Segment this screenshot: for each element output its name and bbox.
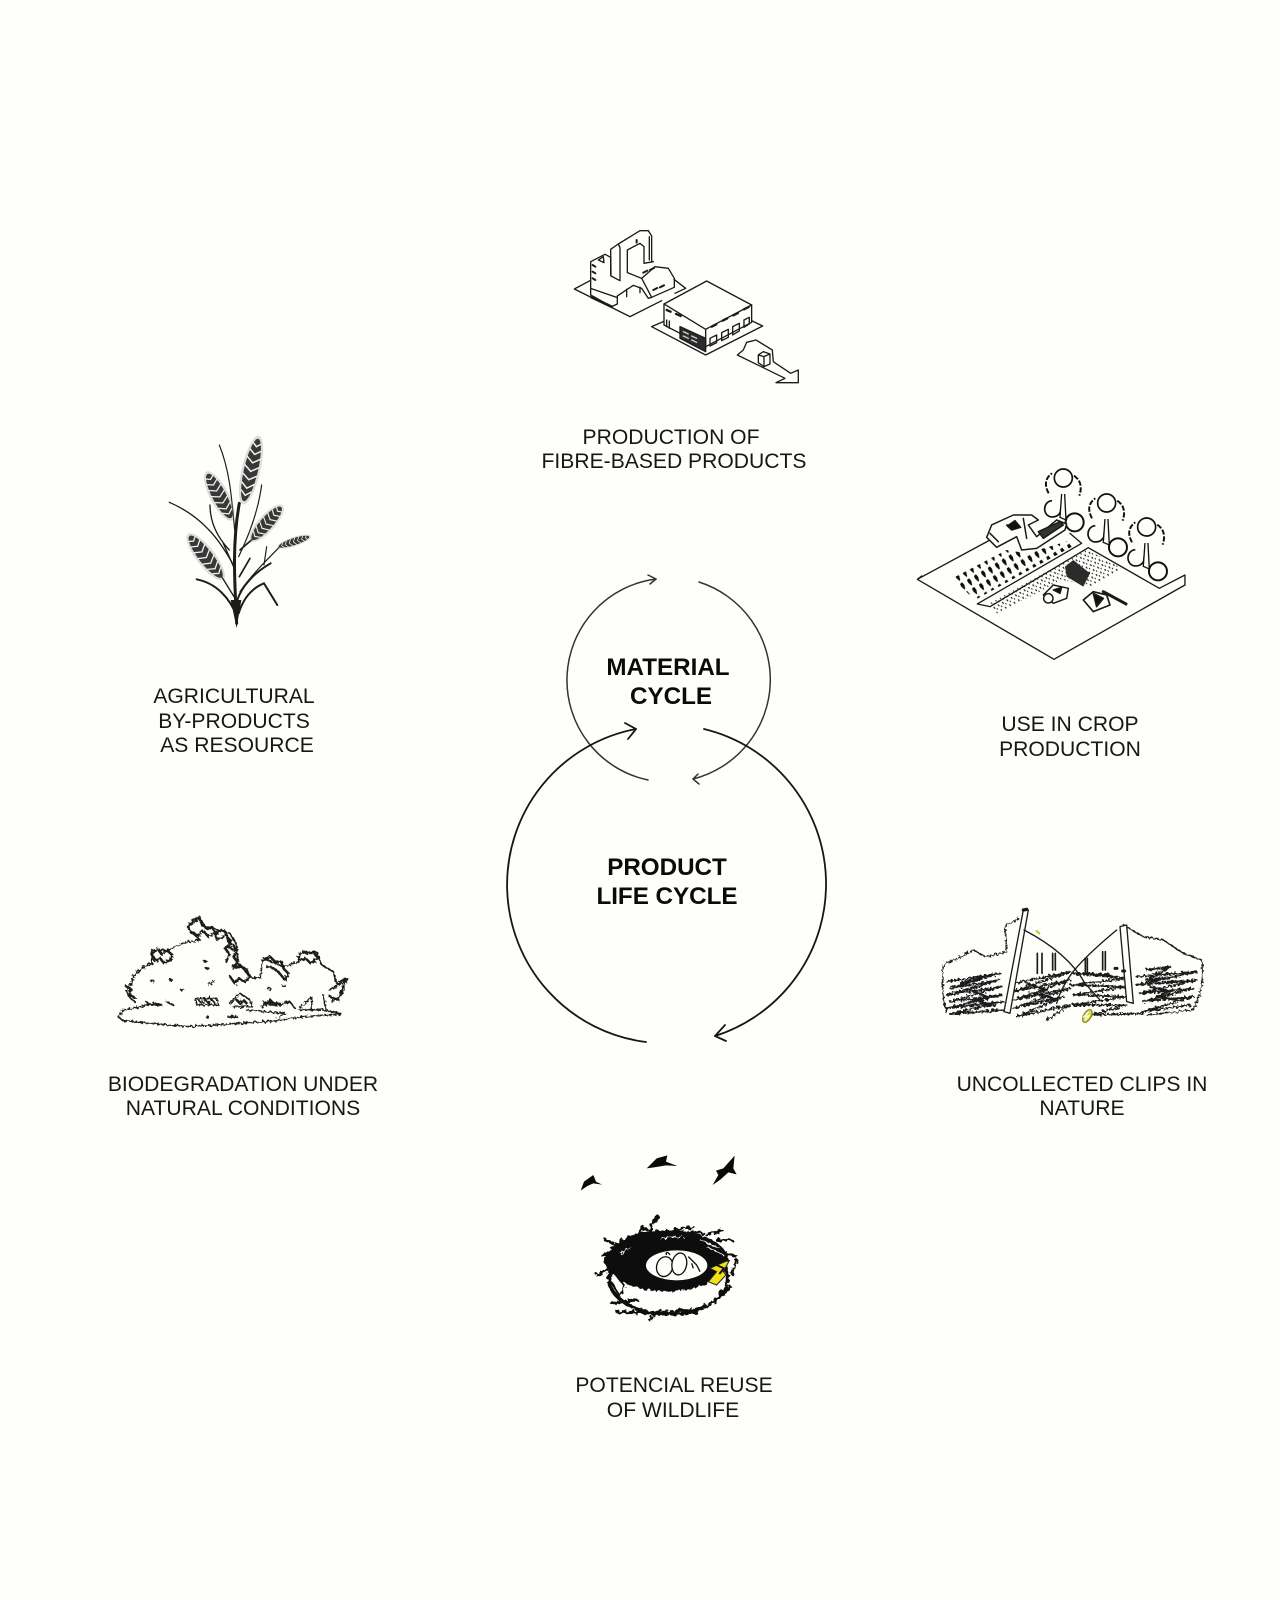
tree canopies (127, 918, 347, 1002)
illustration: factory buildings (574, 231, 798, 383)
illustration: birds and nest (581, 1155, 737, 1320)
seedling rows (990, 549, 1122, 613)
heading: product life cycle: PRODUCT (607, 854, 727, 881)
label: agricultural by-products as resource: BY-PRODUCTS (158, 710, 310, 733)
label: potencial reuse of wildlife: OF WILDLIFE (607, 1399, 739, 1422)
material cycle arrows (567, 575, 770, 784)
birds (581, 1155, 737, 1191)
label: uncollected clips in nature: UNCOLLECTED CLIPS IN (957, 1073, 1207, 1096)
product life cycle arrows (507, 723, 826, 1042)
label: agricultural by-products as resource: AS RESOURCE (160, 734, 314, 757)
illustration: wheat (169, 433, 312, 628)
label: biodegradation under natural conditions: NATURAL CONDITIONS (126, 1097, 360, 1120)
illustration: trees biodegradation (118, 917, 347, 1027)
greenhouse (987, 515, 1067, 550)
poles and wires (1004, 909, 1133, 1013)
ground outline (118, 1006, 342, 1027)
heading: material cycle: MATERIAL (606, 654, 730, 681)
clip on wire (1036, 931, 1040, 934)
illustration: crop field (917, 469, 1185, 659)
plate under second building (652, 321, 763, 355)
label: production of fibre-based products: FIBRE-BASED PRODUCTS (542, 450, 806, 473)
label: use in crop production: PRODUCTION (999, 738, 1141, 761)
heading: product life cycle: LIFE CYCLE (596, 883, 738, 910)
label: biodegradation under natural conditions: BIODEGRADATION UNDER (108, 1073, 378, 1096)
tractor (1043, 585, 1068, 603)
arrow shaped plot (737, 340, 798, 383)
label: potencial reuse of wildlife: POTENCIAL REUSE (575, 1374, 773, 1397)
label: uncollected clips in nature: NATURE (1039, 1097, 1125, 1120)
plant rows (952, 540, 1075, 600)
first factory building (591, 231, 674, 307)
label: agricultural by-products as resource: AGRICULTURAL (153, 685, 315, 708)
plate under first building (574, 279, 686, 317)
vegetation scribbles (942, 918, 1203, 1020)
yellow clip in nest (708, 1261, 729, 1285)
second factory building (664, 281, 752, 352)
label: production of fibre-based products: PRODUCTION OF (583, 426, 759, 449)
canopy scribbles (126, 917, 347, 1000)
yellow clip (1081, 1008, 1094, 1024)
heading: material cycle: CYCLE (630, 683, 712, 710)
nest (597, 1217, 737, 1320)
field boundary (917, 533, 1185, 659)
trees (1045, 469, 1167, 580)
harvester (1083, 592, 1126, 612)
stems and leaves (169, 445, 279, 623)
eggs (654, 1252, 700, 1278)
undergrowth (145, 980, 326, 1011)
illustration: uncollected clips in nature (942, 909, 1203, 1024)
wheat ears (180, 433, 312, 585)
label: use in crop production: USE IN CROP (1001, 713, 1139, 736)
storage rack (1065, 560, 1090, 587)
